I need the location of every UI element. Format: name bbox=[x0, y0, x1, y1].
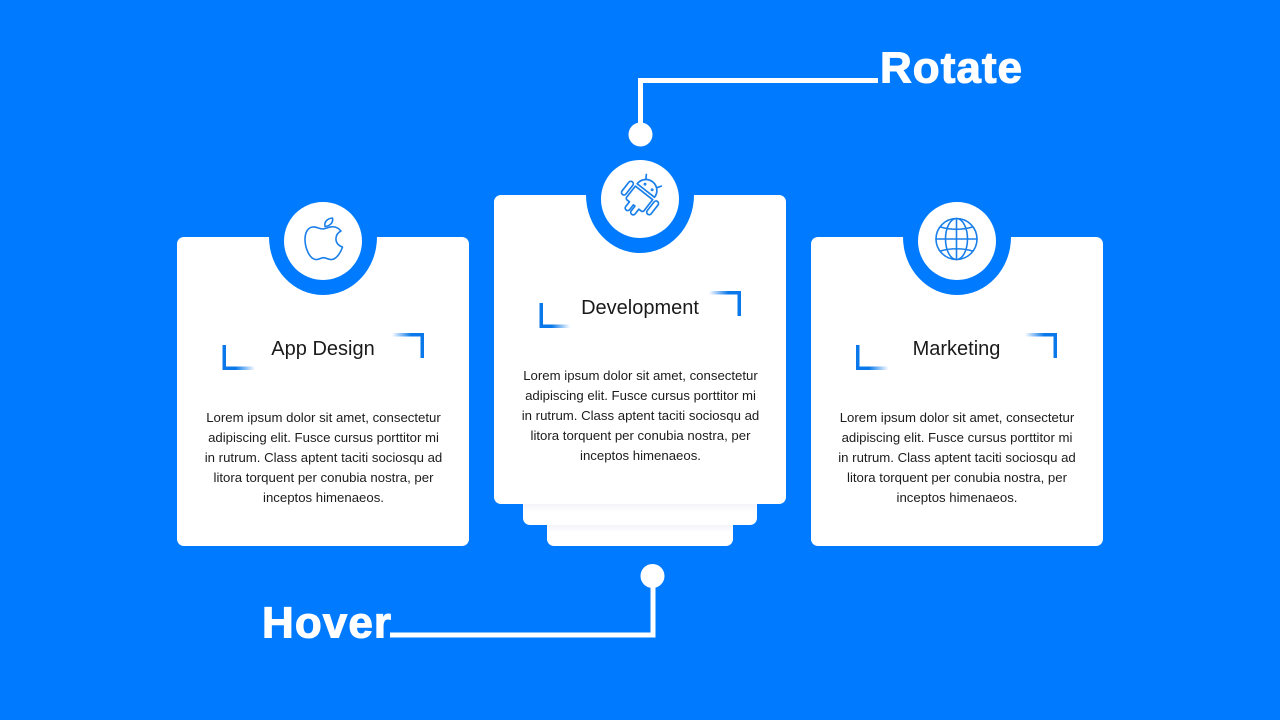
corner bracket bottom-left bbox=[540, 303, 570, 328]
panel: Development card stack bbox=[494, 160, 786, 546]
text block: Development body: adipiscing elit. Fusce cursus porttitor mi bbox=[525, 388, 756, 403]
text block: App Design body: in rutrum. Class aptent taciti sociosqu ad bbox=[205, 450, 442, 465]
icon: globe badge bbox=[903, 202, 1011, 295]
corner bracket top-right bbox=[392, 333, 424, 358]
text block: Development body: inceptos himenaeos. bbox=[580, 448, 701, 463]
panel: Marketing card bbox=[811, 202, 1103, 546]
text block: Marketing body bbox=[838, 410, 1076, 505]
arrow: Rotate connector bbox=[628, 80, 878, 146]
arrow: Hover connector bbox=[390, 564, 664, 635]
panel: App Design card bbox=[177, 202, 469, 546]
text block: Development body: in rutrum. Class aptent taciti sociosqu ad bbox=[522, 408, 759, 423]
heading: Development: Development bbox=[581, 297, 699, 319]
corner bracket bottom-left bbox=[222, 345, 255, 370]
stacked layer upper bbox=[523, 490, 757, 525]
text block: Marketing body: litora torquent per conubia nostra, per bbox=[847, 470, 1068, 485]
text block: Marketing body: in rutrum. Class aptent taciti sociosqu ad bbox=[838, 450, 1076, 465]
text block: App Design body: inceptos himenaeos. bbox=[263, 490, 384, 505]
icon: apple badge bbox=[269, 202, 377, 295]
corner bracket top-right bbox=[709, 291, 741, 316]
text block: App Design body bbox=[205, 410, 442, 505]
text block: Development body bbox=[522, 368, 759, 463]
text block: App Design body: adipiscing elit. Fusce cursus porttitor mi bbox=[208, 430, 439, 445]
text block: App Design body: litora torquent per conubia nostra, per bbox=[214, 470, 434, 485]
card front bbox=[494, 195, 786, 504]
text block: Development body: litora torquent per conubia nostra, per bbox=[531, 428, 751, 443]
icon: android badge bbox=[586, 160, 694, 253]
label: Hover: Hover bbox=[262, 598, 391, 648]
heading: Marketing: Marketing bbox=[913, 338, 1000, 360]
label: Rotate: Rotate bbox=[880, 44, 1022, 92]
stacked layer lower bbox=[547, 510, 733, 546]
text block: Development body: Lorem ipsum dolor sit amet, consectetur bbox=[523, 368, 758, 383]
text block: Marketing body: Lorem ipsum dolor sit amet, consectetur bbox=[840, 410, 1075, 425]
corner bracket bottom-left bbox=[856, 345, 888, 370]
heading: App Design: App Design bbox=[271, 338, 375, 360]
corner bracket top-right bbox=[1025, 333, 1057, 358]
text block: App Design body: Lorem ipsum dolor sit amet, consectetur bbox=[206, 410, 441, 425]
text block: Marketing body: inceptos himenaeos. bbox=[897, 490, 1017, 505]
text block: Marketing body: adipiscing elit. Fusce cursus porttitor mi bbox=[842, 430, 1072, 445]
